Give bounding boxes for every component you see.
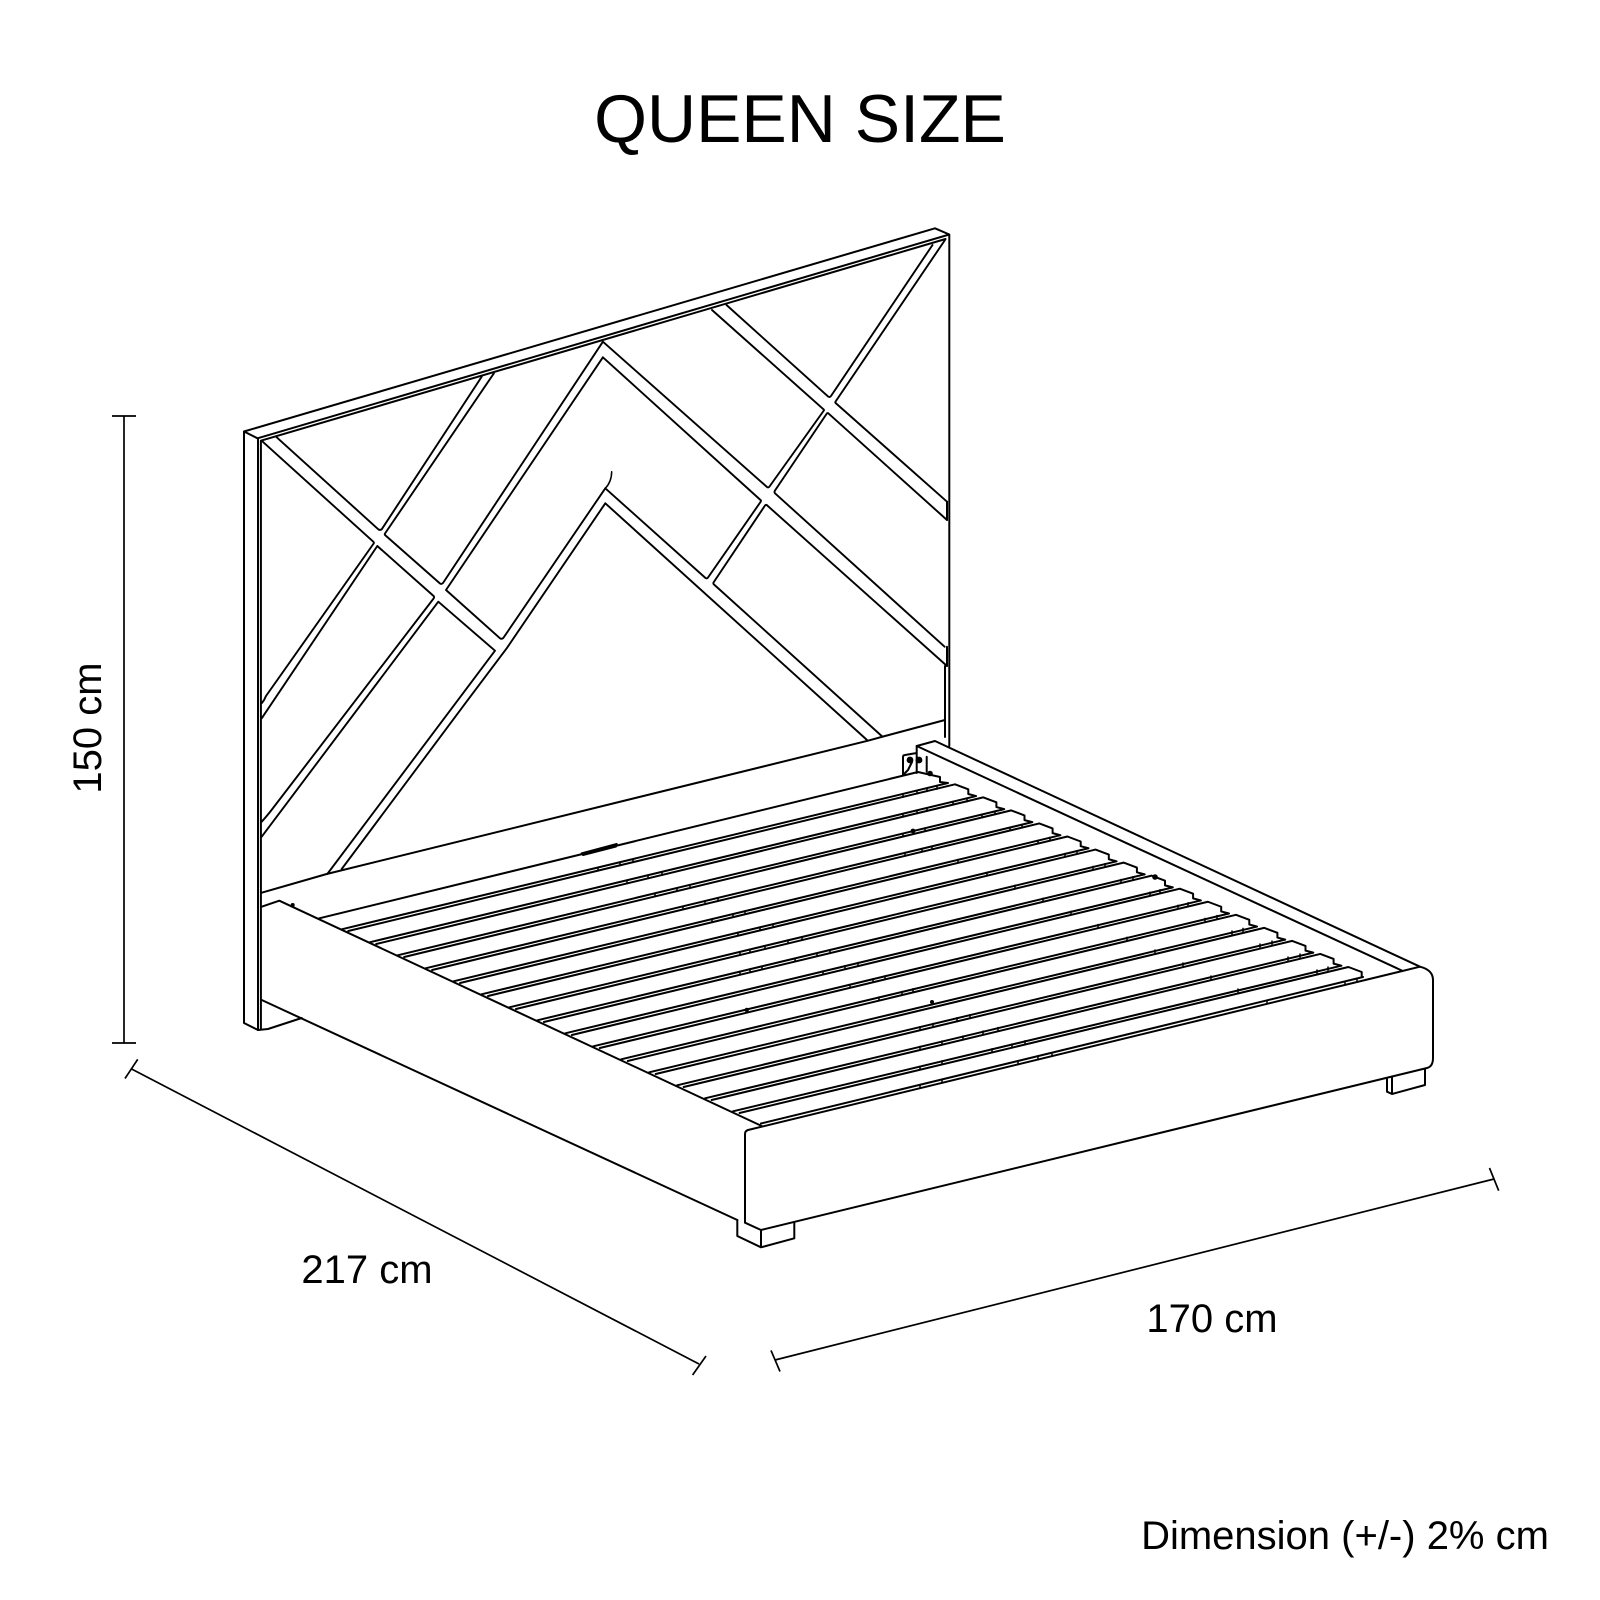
hardware details bbox=[291, 746, 1158, 1012]
side rail bbox=[262, 901, 762, 1220]
headboard diagonal panels bbox=[262, 240, 947, 874]
title: QUEEN SIZE bbox=[594, 81, 1006, 157]
front leg bbox=[737, 1220, 794, 1247]
height dimension bbox=[66, 416, 136, 1043]
tolerance note: Dimension (+/-) 2% cm bbox=[1141, 1514, 1549, 1558]
headboard frame bbox=[244, 228, 949, 1030]
front rail bbox=[745, 967, 1433, 1230]
slat gap ticks bbox=[598, 786, 1357, 1088]
bed line drawing bbox=[244, 228, 1433, 1247]
length dimension bbox=[125, 1059, 706, 1375]
headboard base rail bbox=[262, 720, 945, 893]
slats bbox=[319, 772, 1363, 1124]
length dimension: 217 cm bbox=[301, 1248, 433, 1292]
width dimension: 170 cm bbox=[1146, 1297, 1278, 1341]
height dimension: 150 cm bbox=[66, 662, 110, 794]
width dimension bbox=[771, 1168, 1499, 1372]
far side rail bbox=[917, 741, 1420, 970]
rear leg bbox=[1387, 1069, 1425, 1094]
